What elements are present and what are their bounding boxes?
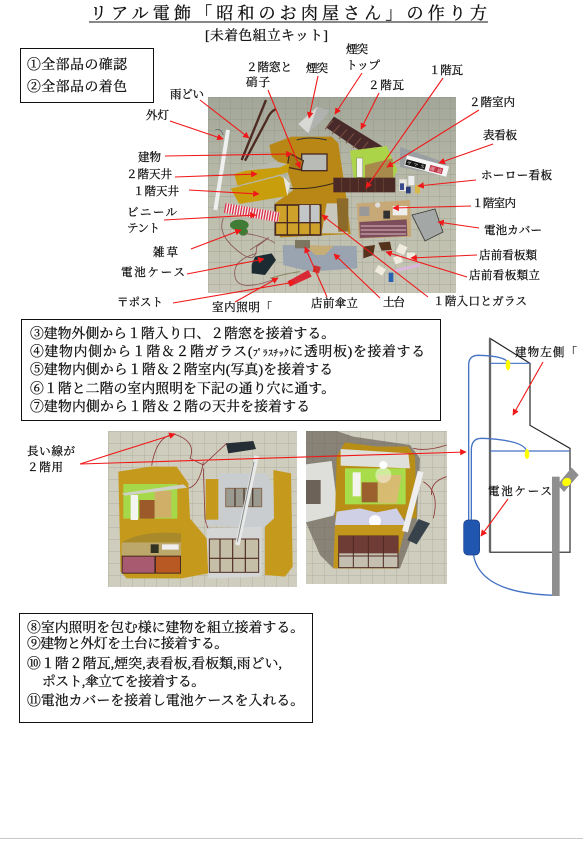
callout: 店前看板類 [411, 248, 538, 262]
callout: 建物左側「 [513, 345, 578, 415]
callout: 雨どい: 雨どい [170, 88, 204, 101]
callout: 室内照明: 室内照明「 [212, 300, 272, 314]
callout: 雑草 [153, 230, 241, 259]
callout: 煙突トップ [335, 42, 380, 114]
callout: 2階天井: ２階天井 [126, 167, 172, 181]
weeds [230, 220, 249, 236]
callout: 1階入口とガラス [322, 215, 527, 308]
panel: steps 3-7: ⑥１階と二階の室内照明を下記の通り穴に通す。 [30, 380, 335, 396]
wires [469, 355, 555, 595]
base [283, 245, 357, 272]
panel: steps 3-7: ⑤建物内側から１階＆２階室内(写真)を接着する [30, 361, 333, 378]
callout: 2階室内: ２階室内 [469, 95, 515, 109]
floor lines [490, 363, 569, 451]
battery cover [412, 209, 443, 241]
lamp head [557, 468, 579, 492]
callout: 2階瓦: ２階瓦 [368, 78, 404, 92]
enamel signs [399, 176, 420, 193]
callout: 1階室内: １階室内 [472, 196, 516, 210]
callout: 1階入口とガラス: １階入口とガラス [433, 294, 527, 308]
callout: 雑草: 雑草 [153, 245, 178, 259]
callout: 1階天井 [133, 184, 259, 198]
callout: 建物左側「: 建物左側「 [515, 345, 578, 359]
photo: interior lighting, open building [108, 431, 297, 587]
panel: steps 8-11: ⑨建物と外灯を土台に接着する。 [27, 635, 228, 651]
callout: 電池カバー [438, 222, 542, 237]
callout: 1階瓦: １階瓦 [429, 63, 464, 77]
panel: steps 1-2 [20, 48, 154, 102]
callout: 煙突トップ: 煙突 [346, 42, 368, 56]
lower ceiling [335, 508, 407, 525]
callout: 表看板: 表看板 [483, 128, 518, 142]
building body [269, 137, 351, 237]
panel: steps 1-2: ①全部品の確認 [27, 56, 128, 72]
callout: 雨どい [170, 88, 249, 138]
callout: 2階天井 [126, 167, 257, 181]
outdoor lamp [215, 130, 228, 210]
left panel [118, 467, 208, 578]
green interior sheet [350, 146, 397, 179]
callout: 煙突 [306, 61, 328, 118]
panel: steps 8-11: ⑩１階２階瓦,煙突,表看板,看板類,雨どい, [27, 655, 282, 671]
tent [225, 208, 279, 217]
panel: steps 8-11: ⑪電池カバーを接着し電池ケースを入れる。 [27, 692, 304, 708]
first floor interior card [357, 200, 411, 239]
callout: 土台 [334, 254, 406, 309]
title: リアル電飾「昭和のお肉屋さん」の作り方 [90, 4, 487, 23]
callout: ビニールテント: ビニール [127, 206, 178, 219]
wires [413, 445, 447, 518]
callout: 2階瓦 [361, 78, 404, 129]
panel: steps 3-7 [22, 320, 440, 420]
entrance frame [275, 205, 321, 235]
building outline [490, 338, 570, 552]
first floor roof tiles [333, 178, 395, 192]
callout: 店前看板類立: 店前看板類立 [469, 268, 540, 282]
right wing [265, 470, 293, 577]
callout: 店前傘立: 店前傘立 [311, 296, 358, 310]
callout: 煙突: 煙突 [306, 61, 328, 75]
callout: 電池ケース: 電池ケース [121, 265, 185, 279]
battery case [252, 253, 276, 275]
callout: 電池ケース [121, 259, 264, 279]
callout: ホーロー看板: ホーロー看板 [481, 168, 552, 182]
callout: 長い線が2階用: 長い線が [27, 445, 76, 458]
callout: 外灯 [146, 108, 223, 139]
umbrella stand and small signs [363, 245, 375, 258]
photo: kit parts [208, 97, 456, 293]
callout: 電池ケース (diagram) [481, 484, 552, 536]
LEDs [506, 360, 510, 370]
lamp [405, 472, 421, 532]
callout: 2階窓と硝子 [246, 60, 300, 168]
wires [222, 218, 277, 285]
second floor roof tiles [326, 116, 382, 150]
callout: 煙突トップ: トップ [346, 59, 380, 72]
callout: ビニールテント [127, 206, 256, 235]
battery case [407, 519, 430, 544]
callout: 店前傘立 [305, 247, 358, 310]
panel: steps 1-2: ②全部品の着色 [27, 78, 127, 94]
front wall and window [333, 525, 406, 568]
callout: 外灯: 外灯 [146, 108, 170, 122]
photo: lit building [306, 431, 447, 584]
battery case [226, 441, 256, 453]
callout: 2階窓と硝子: 硝子 [246, 75, 270, 89]
battery case [464, 520, 480, 555]
callout: 1階室内 [393, 196, 516, 210]
panel: steps 3-7: ④建物内側から１階＆２階ガラス(ﾌﾟﾗｽﾁｯｸに透明板)を接着する [30, 343, 425, 360]
panel: steps 3-7: ⑦建物内側から１階＆２階の天井を接着する [30, 398, 310, 414]
lamp post [552, 477, 560, 596]
callout: 建物: 建物 [138, 150, 162, 164]
photo: kit parts: 商店 [429, 165, 443, 175]
subtitle: [未着色組立キット] [205, 27, 328, 43]
callout: 長い線が2階用: ２階用 [27, 460, 63, 474]
panel: steps 8-11: ポスト,傘立てを接着する。 [42, 673, 205, 689]
rain gutters [242, 100, 276, 161]
callout: 表看板 [439, 128, 518, 163]
sign backing and sign [400, 147, 447, 175]
first floor wall [207, 527, 262, 578]
diagram: wiring side view [464, 338, 579, 596]
roof chimney top [298, 107, 329, 133]
callout: 1階瓦 [366, 63, 464, 188]
callout: 2階窓と硝子: ２階窓と [246, 60, 292, 74]
callout: 土台: 土台 [383, 295, 406, 309]
callout: 2階室内 [387, 95, 515, 167]
callout: 室内照明 [212, 278, 278, 314]
open door [306, 461, 337, 522]
callout: 長い線が2階用 [27, 434, 466, 474]
panel: steps 3-7: ③建物外側から１階入り口、２階窓を接着する。 [30, 325, 335, 341]
callout: 〒ポスト: 〒ポスト [117, 296, 163, 309]
panel: steps 8-11: ⑧室内照明を包む様に建物を組立接着する。 [27, 619, 304, 635]
callout: 〒ポスト [117, 282, 295, 309]
lamp [237, 456, 257, 545]
panel: steps 8-11 [20, 614, 312, 722]
second floor wall with window [205, 473, 275, 528]
ceilings [234, 162, 290, 186]
wires [151, 434, 227, 528]
callout: 1階天井: １階天井 [133, 184, 180, 198]
photo: kit parts: ヤマネ [406, 159, 426, 171]
callout: ビニールテント: テント [127, 223, 160, 235]
upper floor [335, 442, 417, 518]
callout: 電池カバー: 電池カバー [484, 223, 542, 237]
callout: ホーロー看板 [418, 168, 552, 186]
callout: 店前看板類立 [386, 252, 540, 282]
shadow [306, 431, 420, 568]
callout: 店前看板類: 店前看板類 [479, 248, 538, 262]
callout: 電池ケース (diagram): 電池ケース [488, 484, 552, 498]
post [287, 270, 312, 287]
